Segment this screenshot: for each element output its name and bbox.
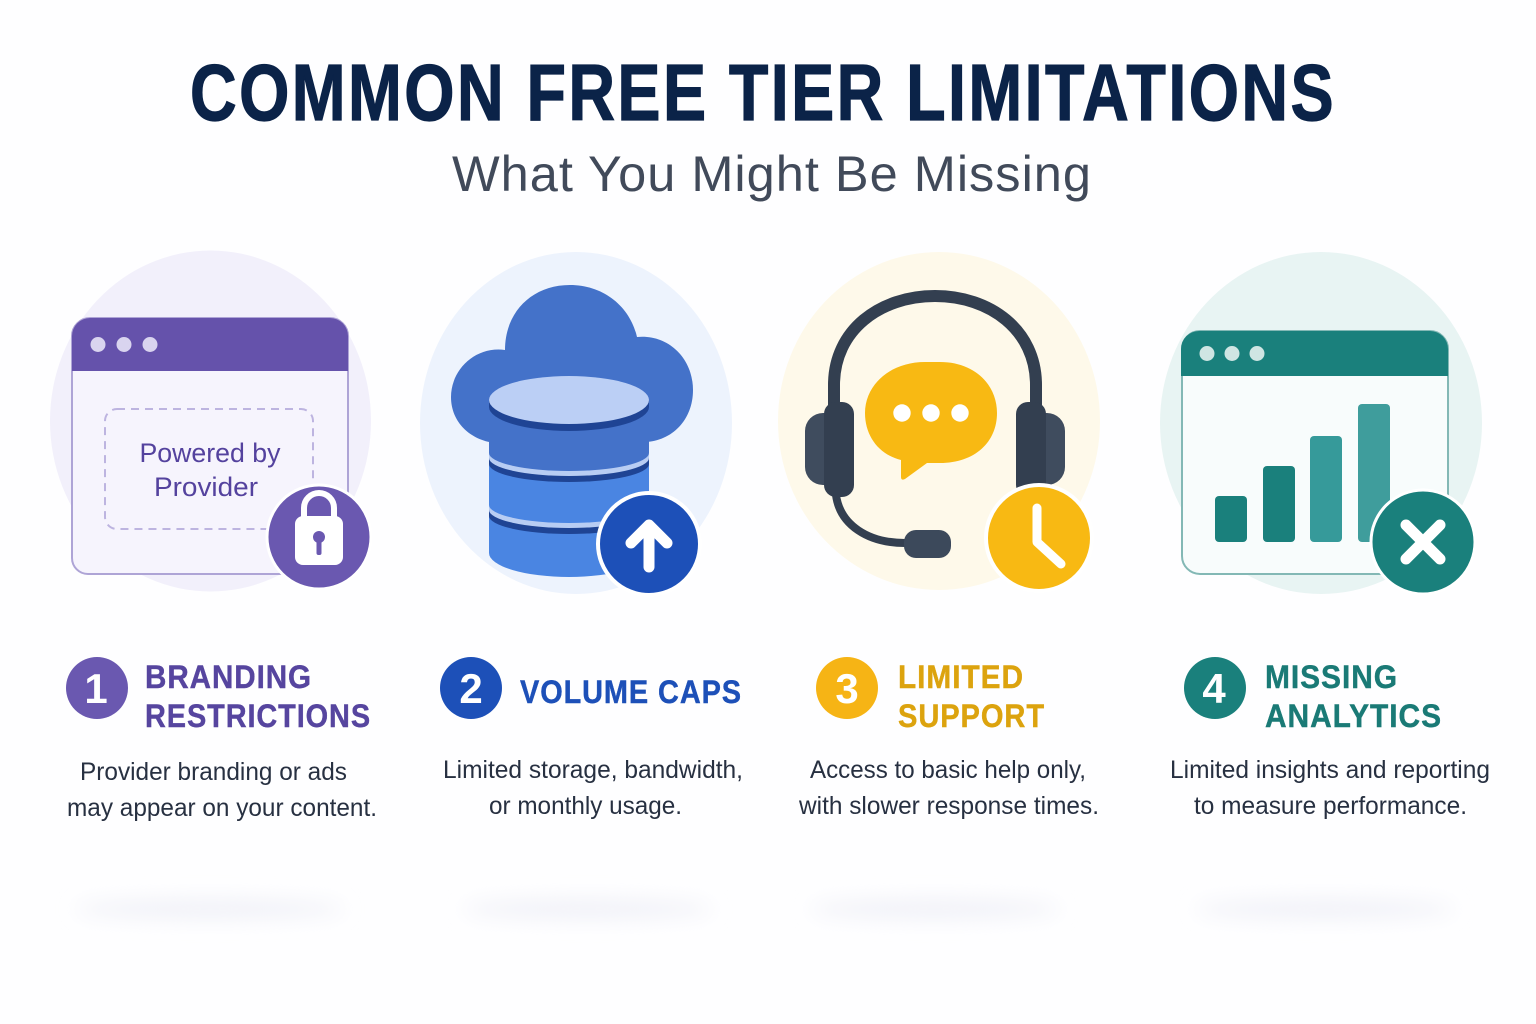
heading: branding restrictions: BRANDING xyxy=(145,659,312,695)
description: missing analytics: to measure performance. xyxy=(1194,792,1467,820)
heading: limited support: LIMITED xyxy=(898,659,1024,695)
icon: browser with provider branding and lock: Provider xyxy=(154,472,258,502)
number badge 4: 4 xyxy=(1202,665,1226,712)
heading: limited support: SUPPORT xyxy=(898,698,1045,734)
heading: missing analytics: MISSING xyxy=(1265,659,1398,695)
icon: browser with provider branding and lock: Powered by xyxy=(140,438,281,468)
panel: missing analytics xyxy=(1160,252,1490,820)
panel: limited support xyxy=(778,252,1100,820)
number badge 2 xyxy=(440,657,502,719)
description: volume caps: or monthly usage. xyxy=(489,792,682,820)
heading: missing analytics: ANALYTICS xyxy=(1265,698,1442,734)
number badge 1: 1 xyxy=(84,665,108,712)
panel: branding restrictions xyxy=(50,250,377,822)
number badge 1 xyxy=(66,657,128,719)
description: branding restrictions: Provider branding or ads xyxy=(80,758,347,786)
description: limited support: with slower response times. xyxy=(798,792,1099,820)
description: branding restrictions: may appear on your content. xyxy=(67,794,377,822)
description: missing analytics: Limited insights and reporting xyxy=(1170,756,1490,784)
number badge 3: 3 xyxy=(835,665,859,712)
heading: volume caps: VOLUME CAPS xyxy=(520,674,742,710)
number badge 2: 2 xyxy=(459,665,483,712)
number badge 3 xyxy=(816,657,878,719)
description: limited support: Access to basic help only, xyxy=(810,756,1086,784)
number badge 4 xyxy=(1184,657,1246,719)
heading: branding restrictions: RESTRICTIONS xyxy=(145,698,371,734)
panel: volume caps xyxy=(420,252,743,820)
icon: headset with chat bubble and clock xyxy=(778,252,1100,591)
icon: analytics window with x xyxy=(1160,252,1482,594)
icon: browser with provider branding and lock xyxy=(50,250,371,592)
icon: cloud database with up arrow xyxy=(420,252,732,595)
description: volume caps: Limited storage, bandwidth, xyxy=(443,756,743,784)
subtitle: What You Might Be Missing xyxy=(452,146,1092,202)
